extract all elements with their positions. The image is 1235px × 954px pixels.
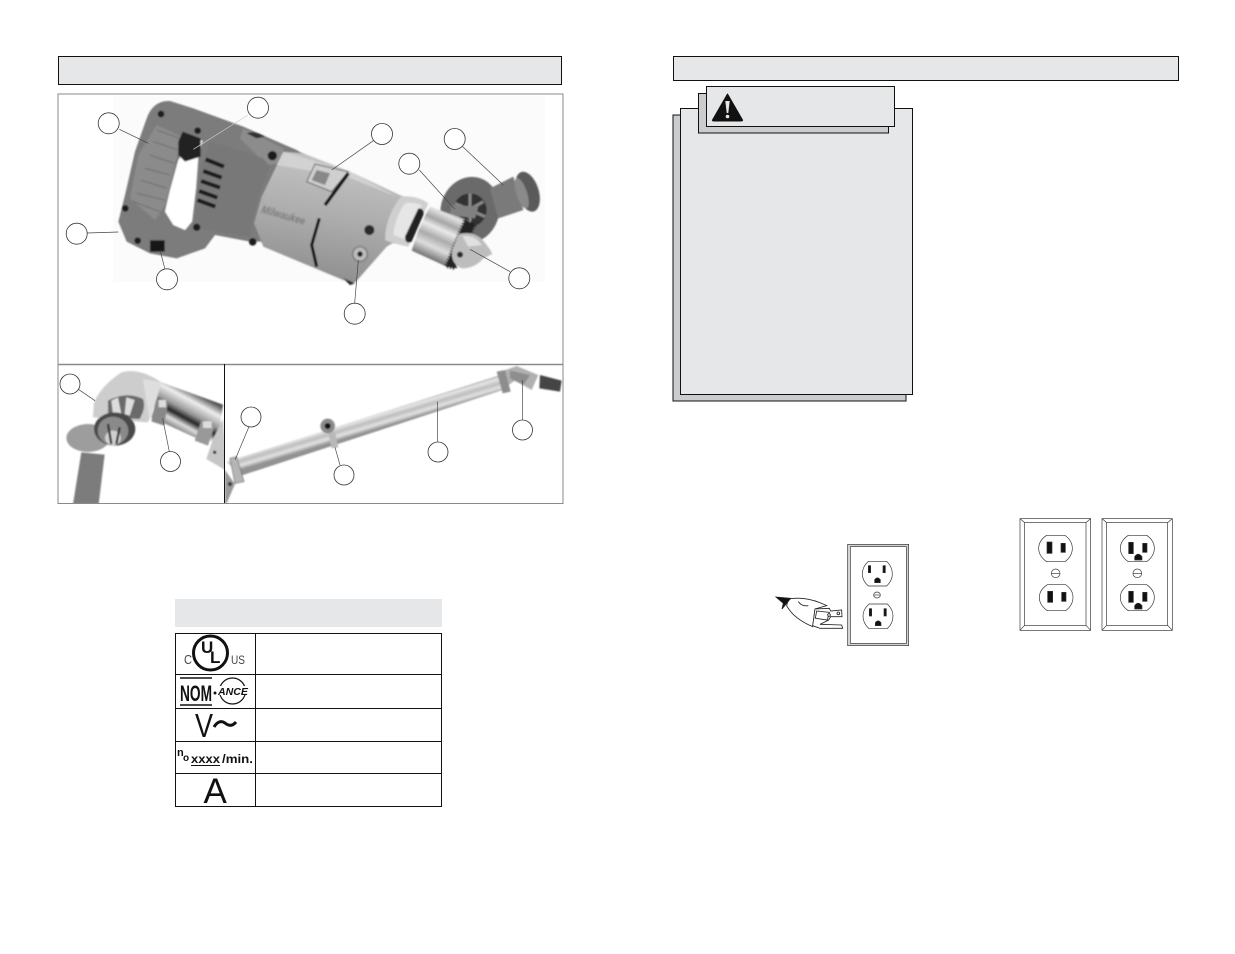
handle grip ridges: [133, 130, 180, 212]
callout circles: angle attachment: [60, 374, 180, 472]
clamp bolts: [151, 399, 168, 426]
chuck barrel: [111, 397, 121, 414]
symbology table: [175, 633, 442, 811]
symbol: NOM ANCE mark: NOM: [180, 681, 212, 706]
symbol: no load speed: [177, 747, 253, 766]
upper receptacle: [862, 561, 892, 586]
symbol: no load speed: n: [177, 747, 184, 759]
symbol: amperes: A: [204, 772, 228, 811]
warning tab: [698, 86, 894, 133]
photo: angle attachment close-up: [66, 371, 226, 504]
panel: warning: [673, 86, 912, 401]
illustration: outlet with plug: [776, 544, 909, 646]
photo: handle and rear housing: [118, 101, 310, 258]
callout lines: extension tube: [235, 380, 523, 465]
symbol: no load speed: xxxx: [191, 752, 220, 766]
callout circles: main tool: [66, 97, 530, 324]
panel: tool photographs: [58, 94, 563, 504]
symbol: UL listing mark: [184, 636, 245, 670]
symbol: UL listing mark: C: [184, 652, 192, 667]
vent slots: [197, 159, 224, 207]
nose collar: [385, 196, 428, 247]
symbol: no load speed: /min.: [222, 752, 253, 766]
photo: chuck and side handle: [385, 169, 545, 268]
brand mark: Milwaukee: [260, 204, 306, 228]
end housing: [206, 420, 224, 470]
label plate: [307, 164, 348, 192]
photo: right angle drill body: [249, 152, 427, 285]
elbow: [93, 371, 161, 422]
icon: warning triangle: [712, 94, 743, 121]
symbol: UL listing mark: L: [210, 648, 220, 667]
symbol: UL listing mark: US: [231, 653, 245, 667]
symbol: UL listing mark: U: [201, 638, 213, 657]
switch: [150, 240, 165, 252]
trigger: [178, 132, 201, 162]
tube: [151, 382, 223, 442]
symbol: volts AC: V: [195, 707, 213, 744]
housing seams: [325, 173, 348, 205]
symbology table heading: [175, 599, 442, 627]
callout circles: extension tube: [241, 407, 532, 485]
fasteners: [122, 111, 277, 244]
lower receptacle: [863, 604, 893, 629]
frame dividers: [58, 364, 563, 366]
chuck teeth: [446, 219, 475, 268]
illustration: three-slot outlet: [1102, 519, 1172, 630]
header bar: left page: [58, 56, 562, 84]
outlet plate: [848, 544, 909, 646]
side handle grip: [490, 177, 523, 218]
plug: [776, 597, 843, 628]
disc: [66, 424, 110, 452]
illustration: two-slot outlet: [1020, 519, 1091, 630]
front motor housing: [254, 152, 427, 283]
symbol: volts AC: [195, 707, 236, 744]
chuck teeth: [94, 412, 135, 446]
chuck barrel: [412, 207, 472, 267]
header bar: right page: [674, 56, 1178, 80]
symbol: NOM ANCE mark: ANCE: [217, 687, 248, 698]
photo: extension tube: [225, 366, 562, 503]
handle opening: [165, 140, 203, 230]
chuck nose: [452, 233, 492, 268]
callout lines: angle attachment: [78, 389, 169, 452]
symbol: no load speed: o: [183, 753, 189, 764]
callout lines: main tool: [87, 115, 510, 303]
disc guard: [433, 170, 507, 250]
symbol: NOM ANCE mark: [180, 678, 248, 706]
